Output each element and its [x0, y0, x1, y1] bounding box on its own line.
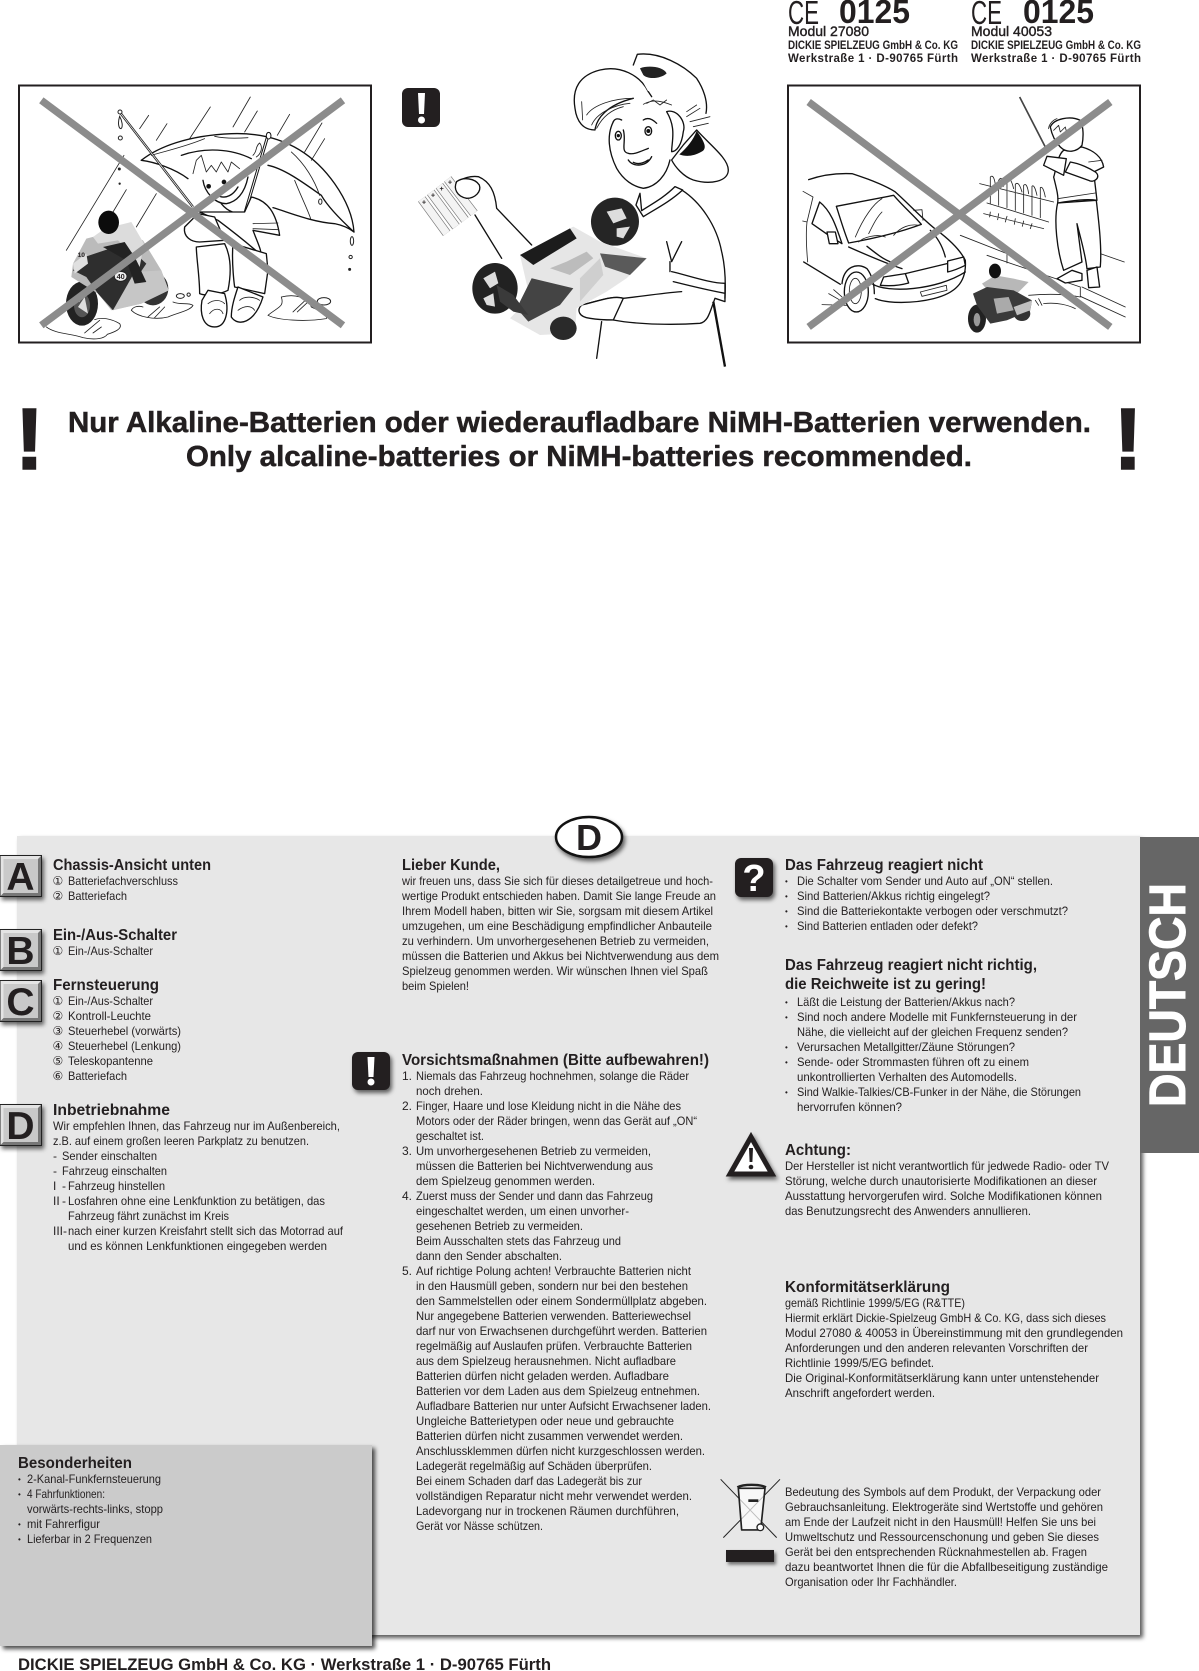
text block: Konformitätserklärung — [785, 1279, 1123, 1400]
text block: Vorsichtsmaßnahmen: Niemals das Fahrzeug hochnehmen, solange die Räder — [416, 1069, 689, 1083]
text block: Fernsteuerung: Steuerhebel (vorwärts) — [68, 1024, 181, 1038]
panel: Besonderheiten: Besonderheiten — [18, 1455, 132, 1472]
text block: Vorsichtsmaßnahmen: 3. — [402, 1144, 412, 1158]
text block: Konformitätserklärung: Hiermit erklärt Dickie-Spielzeug GmbH & Co. KG, dass sich dieses — [785, 1311, 1106, 1325]
text block: Das Fahrzeug reagiert nicht: Sind Batterien entladen oder defekt? — [797, 919, 978, 933]
headline: battery recommendation — [68, 407, 1091, 473]
text block: Das Fahrzeug reagiert nicht: • — [785, 907, 788, 916]
text block: Vorsichtsmaßnahmen: regelmäßig auf Auslaufen prüfen. Verbrauchte Batterien — [416, 1339, 692, 1353]
text block: Konformitätserklärung: gemäß Richtlinie 1999/5/EG (R&TTE) — [785, 1296, 965, 1310]
umbrella — [141, 132, 354, 232]
certification block: module 40053: DICKIE SPIELZEUG GmbH & Co. KG — [971, 40, 1141, 52]
antenna — [1020, 97, 1045, 147]
text block: Fernsteuerung: Teleskopantenne — [68, 1054, 153, 1068]
text block: Inbetriebnahme: Inbetriebnahme — [53, 1102, 170, 1119]
antenna — [118, 110, 193, 207]
text block: Konformitätserklärung: Modul 27080 & 40053 in Übereinstimmung mit den grundlegenden — [785, 1326, 1123, 1340]
text block: Fernsteuerung: ⑥ — [52, 1069, 63, 1083]
text block: Vorsichtsmaßnahmen: in den Hausmüll geben, sondern nur bei den bestehen — [416, 1279, 688, 1293]
text block: Vorsichtsmaßnahmen: Gerät vor Nässe schützen. — [416, 1519, 543, 1533]
crossed-out mark — [809, 102, 1110, 327]
text block: Fernsteuerung: ② — [52, 1009, 63, 1023]
icon: exclamation — [352, 1052, 390, 1090]
motorcycle photo — [66, 211, 169, 326]
text block: Fernsteuerung: Batteriefach — [68, 1069, 127, 1083]
text block: Vorsichtsmaßnahmen: Bei einem Schaden darf das Ladegerät bis zur — [416, 1474, 642, 1488]
text block: Das Fahrzeug reagiert nicht richtig: unkontrollierten Verhalten des Automodells. — [797, 1070, 1017, 1084]
text block: Chassis-Ansicht unten — [52, 857, 211, 903]
warning mark right: ! — [1114, 391, 1142, 488]
icon: question mark: ? — [742, 858, 766, 900]
puddles — [46, 296, 326, 339]
batteries — [422, 177, 474, 233]
text block: Das Fahrzeug reagiert nicht: • — [785, 877, 788, 886]
text block: Vorsichtsmaßnahmen: Ungleiche Batterietypen oder neue und gebrauchte — [416, 1414, 674, 1428]
text block: disposal note: Gebrauchsanleitung. Elektrogeräte sind Wertstoffe und gehören — [785, 1500, 1103, 1514]
text block: Chassis-Ansicht unten: Batteriefach — [68, 889, 127, 903]
text block: Das Fahrzeug reagiert nicht richtig: Sende- oder Strommasten führen oft zu einem — [797, 1055, 1029, 1069]
text block: Das Fahrzeug reagiert nicht: Die Schalter vom Sender und Auto auf „ON“ stellen. — [797, 874, 1053, 888]
text block: Chassis-Ansicht unten: ① — [52, 874, 63, 888]
country badge D: D — [576, 817, 602, 858]
text block: Das Fahrzeug reagiert nicht: Das Fahrzeug reagiert nicht — [785, 857, 983, 874]
batteries: + — [448, 177, 452, 186]
text block: Vorsichtsmaßnahmen: Finger, Haare und lose Kleidung nicht in die Nähe des — [416, 1099, 681, 1113]
panel: Besonderheiten: • — [18, 1490, 21, 1499]
text block: Das Fahrzeug reagiert nicht richtig: Sind noch andere Modelle mit Funkfernsteuerung in der — [797, 1010, 1077, 1024]
certification block: module 27080: Modul 27080 — [788, 24, 869, 39]
text block: Vorsichtsmaßnahmen: Anschlussklemmen dürfen nicht kurzgeschlossen werden. — [416, 1444, 705, 1458]
text block: Vorsichtsmaßnahmen: Um unvorhergesehenen Betrieb zu vermeiden, — [416, 1144, 651, 1158]
text block: Lieber Kunde — [401, 857, 719, 993]
language tab: DEUTSCH: DEUTSCH — [1139, 883, 1196, 1107]
cap — [574, 69, 667, 130]
text block: Lieber Kunde: beim Spielen! — [402, 979, 469, 993]
rain streaks — [66, 97, 325, 250]
panel: do not use near cars and street — [788, 86, 1140, 342]
text block: Chassis-Ansicht unten: Chassis-Ansicht unten — [53, 857, 211, 874]
text block: Das Fahrzeug reagiert nicht richtig: Sind Walkie-Talkies/CB-Funker in der Nähe, die Störungen — [797, 1085, 1081, 1099]
text block: Vorsichtsmaßnahmen: Batterien dürfen nicht zusammen verwendet werden. — [416, 1429, 683, 1443]
text block: Inbetriebnahme: Fahrzeug hinstellen — [68, 1179, 165, 1193]
text block: Inbetriebnahme: I — [53, 1179, 56, 1193]
text block: Inbetriebnahme: z.B. auf einem großen leeren Parkplatz zu benutzen. — [53, 1134, 309, 1148]
text block: Vorsichtsmaßnahmen: noch drehen. — [416, 1084, 483, 1098]
panel: do not use in rain — [19, 86, 371, 342]
text block: Fernsteuerung: ④ — [52, 1039, 63, 1053]
text block: Das Fahrzeug reagiert nicht richtig: hervorrufen können? — [797, 1100, 902, 1114]
text block: disposal note: dazu beantwortet Ihnen die für die Abfallbeseitigung zuständige — [785, 1560, 1108, 1574]
certification block: module 40053: Modul 40053 — [971, 24, 1052, 39]
text block: Vorsichtsmaßnahmen: vollständigen Reparatur nicht mehr verwendet werden. — [416, 1489, 692, 1503]
text block: Fernsteuerung — [52, 977, 181, 1083]
face — [615, 131, 621, 140]
text block: Das Fahrzeug reagiert nicht richtig: Nähe, die vielleicht auf der gleichen Frequenz senden? — [797, 1025, 1068, 1039]
text block: Konformitätserklärung: Anschrift angefordert werden. — [785, 1386, 935, 1400]
race number: 40 — [117, 272, 125, 281]
text block: Lieber Kunde: zu verhindern. Um unvorhergesehenen Betrieb zu vermeiden, — [402, 934, 709, 948]
text block: Inbetriebnahme: Wir empfehlen Ihnen, das Fahrzeug nur im Außenbereich, — [53, 1119, 340, 1133]
text block: Vorsichtsmaßnahmen: Batterien dürfen nicht geladen werden. Aufladbare — [416, 1369, 669, 1383]
text block: Das Fahrzeug reagiert nicht richtig: die Reichweite ist zu gering! — [785, 976, 986, 993]
illustration: boy inserting batteries — [422, 54, 728, 367]
text block: Inbetriebnahme: III- — [53, 1224, 67, 1238]
badge A — [0, 856, 42, 899]
boy outline — [574, 54, 728, 367]
text block: Achtung: Der Hersteller ist nicht verantwortlich für jedwede Radio- oder TV — [785, 1159, 1109, 1173]
text block: Lieber Kunde: wir freuen uns, dass Sie sich für dieses detailgetreue und hoch- — [401, 874, 713, 888]
text block: Achtung: das Benutzungsrecht des Anwenders annullieren. — [785, 1204, 1031, 1218]
batteries: + — [422, 197, 426, 206]
text block: Vorsichtsmaßnahmen: Aufladbare Batterien nur unter Aufsicht Erwachsener laden. — [416, 1399, 711, 1413]
text block: Fernsteuerung: Fernsteuerung — [53, 977, 159, 994]
certification block: module 27080: Werkstraße 1 · D-90765 Fürth — [788, 53, 958, 65]
text block: Vorsichtsmaßnahmen: Auf richtige Polung achten! Verbrauchte Batterien nicht — [416, 1264, 692, 1278]
text block: Achtung: Störung, welche durch unautorisierte Modifikationen an dieser — [785, 1174, 1097, 1188]
race number — [78, 252, 127, 281]
race number: 10 — [78, 252, 85, 259]
certification block: module 27080: DICKIE SPIELZEUG GmbH & Co. KG — [788, 40, 958, 52]
car — [803, 174, 965, 312]
text block: Chassis-Ansicht unten: Batteriefachverschluss — [68, 874, 178, 888]
boy under umbrella — [184, 155, 280, 327]
text block: disposal note: am Ende der Laufzeit nicht in den Hausmüll! Helfen Sie uns bei — [785, 1515, 1096, 1529]
text block: Das Fahrzeug reagiert nicht richtig: • — [785, 1058, 788, 1067]
text block: Vorsichtsmaßnahmen: geschaltet ist. — [416, 1129, 484, 1143]
batteries: + — [431, 191, 435, 200]
panel: Besonderheiten: 4 Fahrfunktionen: — [27, 1487, 105, 1501]
headline: battery recommendation: Only alcaline-batteries or NiMH-batteries recommended. — [186, 441, 972, 473]
text block: Vorsichtsmaßnahmen: 5. — [402, 1264, 412, 1278]
badge D — [0, 1104, 42, 1148]
text block: Fernsteuerung: ⑤ — [52, 1054, 63, 1068]
text block: Vorsichtsmaßnahmen: Vorsichtsmaßnahmen (Bitte aufbewahren!) — [402, 1052, 709, 1069]
text block: Ein-/Aus-Schalter — [52, 927, 177, 958]
text block: Inbetriebnahme: Losfahren ohne eine Lenkfunktion zu betätigen, das — [68, 1194, 325, 1208]
text block: disposal note — [785, 1485, 1108, 1589]
text block: Inbetriebnahme: Fahrzeug fährt zunächst im Kreis — [68, 1209, 229, 1223]
icon: exclamation above batteries — [402, 88, 440, 127]
text block: Vorsichtsmaßnahmen: gesehenen Betrieb zu vermeiden. — [416, 1219, 583, 1233]
text block: Vorsichtsmaßnahmen: Ladevorgang nur in trockenen Räumen durchführen, — [416, 1504, 679, 1518]
text block: Vorsichtsmaßnahmen: Zuerst muss der Sender und dann das Fahrzeug — [416, 1189, 653, 1203]
text block: disposal note: Umweltschutz und Ressourcenschonung und geben Sie dieses — [785, 1530, 1099, 1544]
badge B — [0, 930, 42, 973]
drops — [118, 116, 354, 305]
text block: Das Fahrzeug reagiert nicht: Sind Batterien/Akkus richtig eingelegt? — [797, 889, 990, 903]
text block: Konformitätserklärung: Richtlinie 1999/5/EG befindet. — [785, 1356, 934, 1370]
text block: Konformitätserklärung: Die Original-Konformitätserklärung kann unter untenstehender — [785, 1371, 1099, 1385]
text block: Das Fahrzeug reagiert nicht richtig: • — [785, 1043, 788, 1052]
icon: question mark — [735, 858, 773, 900]
text block: disposal note: Gerät bei den entsprechenden Rücknahmestellen ab. Fragen — [785, 1545, 1087, 1559]
certification block: module 40053: Werkstraße 1 · D-90765 Fürth — [971, 53, 1141, 65]
text block: Vorsichtsmaßnahmen: 2. — [402, 1099, 412, 1113]
panel: Besonderheiten: 2-Kanal-Funkfernsteuerung — [27, 1472, 161, 1486]
text block: Vorsichtsmaßnahmen: Beim Ausschalten stets das Fahrzeug und — [416, 1234, 621, 1248]
panel: Besonderheiten: Lieferbar in 2 Frequenzen — [27, 1532, 152, 1546]
text block: Fernsteuerung: ③ — [52, 1024, 63, 1038]
warning mark left: ! — [15, 391, 44, 488]
badge C: C — [6, 981, 35, 1024]
hand holding batteries — [455, 179, 480, 198]
text block: Ein-/Aus-Schalter: Ein-/Aus-Schalter — [68, 944, 153, 958]
text block: Das Fahrzeug reagiert nicht richtig: Verursachen Metallgitter/Zäune Störungen? — [797, 1040, 1015, 1054]
crossed-out mark — [41, 100, 343, 325]
text block: Vorsichtsmaßnahmen: 1. — [402, 1069, 412, 1083]
text block: Lieber Kunde: Lieber Kunde, — [402, 857, 500, 874]
text block: Achtung — [785, 1142, 1109, 1218]
text block: Vorsichtsmaßnahmen: Ladegerät regelmäßig auf Schäden überprüfen. — [416, 1459, 652, 1473]
road edges — [960, 235, 1125, 317]
text block: Das Fahrzeug reagiert nicht richtig: • — [785, 998, 788, 1007]
panel: Besonderheiten: vorwärts-rechts-links, stopp — [27, 1502, 163, 1516]
text block: Fernsteuerung: Ein-/Aus-Schalter — [68, 994, 153, 1008]
panel: Besonderheiten: • — [18, 1520, 21, 1529]
text block: Konformitätserklärung: Anforderungen und den anderen relevanten Vorschriften der — [785, 1341, 1088, 1355]
text block: disposal note: Organisation oder Ihr Fachhändler. — [785, 1575, 957, 1589]
text block: Vorsichtsmaßnahmen: 4. — [402, 1189, 412, 1203]
text block: Achtung: Achtung: — [785, 1142, 851, 1159]
text block: Das Fahrzeug reagiert nicht — [785, 857, 1068, 933]
text block: Vorsichtsmaßnahmen: dem Spielzeug genommen werden. — [416, 1174, 595, 1188]
text block: Inbetriebnahme: Sender einschalten — [62, 1149, 157, 1163]
text block: Das Fahrzeug reagiert nicht: Sind die Batteriekontakte verbogen oder verschmutzt? — [797, 904, 1068, 918]
badge D: D — [6, 1105, 35, 1148]
panel: Besonderheiten: • — [18, 1475, 21, 1484]
badge A: A — [6, 856, 35, 899]
country badge D — [556, 817, 622, 858]
text block: disposal note: Bedeutung des Symbols auf dem Produkt, der Verpackung oder — [785, 1485, 1101, 1499]
panel: Besonderheiten: mit Fahrerfigur — [27, 1517, 100, 1531]
motorcycle held in hands — [472, 198, 647, 340]
text block: Lieber Kunde: wertige Produkt entschieden haben. Damit Sie lange Freude an — [401, 889, 716, 903]
badge C — [0, 980, 42, 1024]
badge B: B — [6, 930, 35, 973]
text block: Vorsichtsmaßnahmen: dann den Sender abschalten. — [416, 1249, 562, 1263]
motorcycle photo — [968, 264, 1032, 333]
text block: Vorsichtsmaßnahmen: eingeschaltet werden, um einen unvorher- — [416, 1204, 629, 1218]
text block: Achtung: Ausstattung hervorgerufen wird. Solche Modifikationen können — [785, 1189, 1102, 1203]
text block: Inbetriebnahme: nach einer kurzen Kreisfahrt stellt sich das Motorrad auf — [68, 1224, 344, 1238]
panel: Besonderheiten — [0, 1445, 372, 1646]
text block: Konformitätserklärung: Konformitätserklärung — [785, 1279, 950, 1296]
text block: Das Fahrzeug reagiert nicht richtig: Läßt die Leistung der Batterien/Akkus nach? — [797, 995, 1015, 1009]
text block: Das Fahrzeug reagiert nicht richtig: Das Fahrzeug reagiert nicht richtig, — [785, 957, 1037, 974]
boy with transmitter — [1044, 118, 1104, 288]
text block: Vorsichtsmaßnahmen: Nur angegebene Batterien verwenden. Batteriewechsel — [416, 1309, 691, 1323]
panel: German instructions background — [17, 836, 1140, 1635]
panel: Besonderheiten: • — [18, 1535, 21, 1544]
text block: Fernsteuerung: ① — [52, 994, 63, 1008]
text block: Vorsichtsmaßnahmen: aus dem Spielzeug herausnehmen. Nicht aufladbare — [416, 1354, 676, 1368]
headline: battery recommendation: Nur Alkaline-Batterien oder wiederaufladbare NiMH-Batterien verwenden. — [68, 407, 1091, 439]
collar and shirt — [636, 187, 683, 217]
raised arm — [457, 176, 532, 258]
text block: Fernsteuerung: Kontroll-Leuchte — [68, 1009, 151, 1023]
text block: Inbetriebnahme: - — [62, 1194, 66, 1208]
text block: Lieber Kunde: Ihrem Modell haben, bitten wir Sie, sorgsam mit diesem Artikel — [402, 904, 713, 918]
text block: Lieber Kunde: umzugehen, um eine Beschädigung empfindlicher Anbauteile — [402, 919, 712, 933]
text block: Vorsichtsmaßnahmen: den Sammelstellen oder einem Sondermüllplatz abgeben. — [416, 1294, 707, 1308]
icon: crossed-out waste bin — [721, 1479, 780, 1562]
icon: warning triangle — [730, 1137, 772, 1174]
text block: Fernsteuerung: Steuerhebel (Lenkung) — [68, 1039, 181, 1053]
text block: Lieber Kunde: müssen die Batterien und Akkus bei Nichtverwendung aus dem — [402, 949, 719, 963]
text block: Inbetriebnahme: und es können Lenkfunktionen eingegeben werden — [68, 1239, 327, 1253]
text block: Vorsichtsmaßnahmen: müssen die Batterien bei Nichtverwendung aus — [416, 1159, 653, 1173]
text block: Das Fahrzeug reagiert nicht richtig: • — [785, 1013, 788, 1022]
text block: Inbetriebnahme: II — [53, 1194, 60, 1208]
text block: Vorsichtsmaßnahmen — [402, 1052, 711, 1533]
text block: Vorsichtsmaßnahmen: Batterien vor dem Laden aus dem Spielzeug entnehmen. — [416, 1384, 700, 1398]
fence — [980, 176, 1054, 229]
text block: Vorsichtsmaßnahmen: Motors oder der Räder bringen, wenn das Gerät auf „ON“ — [416, 1114, 697, 1128]
text block: Das Fahrzeug reagiert nicht: • — [785, 892, 788, 901]
batteries: + — [440, 184, 444, 193]
text block: Inbetriebnahme — [53, 1102, 344, 1253]
text block: Chassis-Ansicht unten: ② — [52, 889, 63, 903]
text block: Inbetriebnahme: - — [62, 1179, 66, 1193]
text block: Inbetriebnahme: - — [53, 1149, 57, 1163]
text block: Inbetriebnahme: Fahrzeug einschalten — [62, 1164, 167, 1178]
text block: Das Fahrzeug reagiert nicht: • — [785, 922, 788, 931]
text block: Ein-/Aus-Schalter: ① — [52, 944, 63, 958]
text block: Das Fahrzeug reagiert nicht richtig — [785, 957, 1081, 1114]
text block: Lieber Kunde: Spielzeug genommen werden. Wir wünschen Ihnen viel Spaß — [402, 964, 708, 978]
certification block: module 40053 — [971, 0, 1141, 65]
text block: Das Fahrzeug reagiert nicht richtig: • — [785, 1088, 788, 1097]
text block: Inbetriebnahme: - — [53, 1164, 57, 1178]
certification block: module 27080 — [788, 0, 958, 65]
text block: Vorsichtsmaßnahmen: darf nur von Erwachsenen durchgeführt werden. Batterien — [416, 1324, 707, 1338]
text block: Ein-/Aus-Schalter: Ein-/Aus-Schalter — [53, 927, 177, 944]
